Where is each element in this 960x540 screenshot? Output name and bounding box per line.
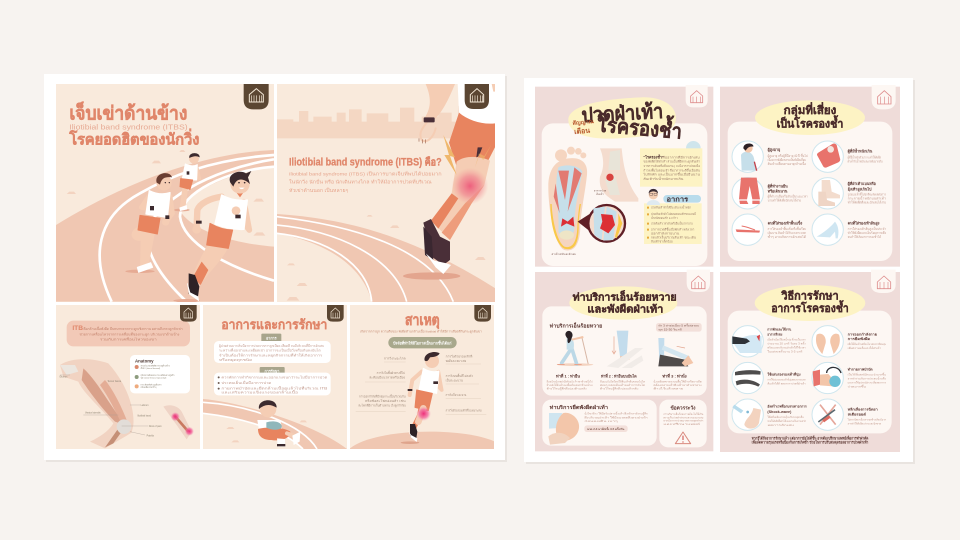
title: ปวดฝ่าเท้า	[581, 100, 664, 127]
muscle leg illustration: Vastus lateralis	[85, 411, 101, 414]
treatment: insoles	[732, 362, 806, 394]
pain glow	[454, 170, 487, 203]
treatment: physiotherapy: เป็นวิธีที่แพทย์มักแนะนำมากขึ้น	[848, 371, 886, 376]
treatment: shock wave	[732, 399, 807, 430]
treatment card: กายภาพบำบัดและยืดกล้ามเนื้อดูแล้วไปที่บริเวณ ITB	[221, 386, 328, 391]
definition box	[640, 148, 702, 187]
left sheet	[44, 74, 507, 462]
definition box: ก้าวลงพื้นในตอนเช้า ซึ่งอาการจะดีขึ้นเมื่อเดิน	[643, 167, 700, 172]
anatomy legend: ITB เสียดสีบริเวณข้อเข่า	[141, 382, 162, 386]
treatment: rest: ประมาณ 20 นาที วันละ 3 ครั้ง	[767, 341, 806, 345]
panel: stretching exercises	[535, 270, 713, 451]
side foot: ส้นเท้า	[596, 192, 604, 196]
footer note	[752, 434, 869, 446]
exercise captions: ข้างหลังให้ส้นเท้าแนบพื้นพร้อมย่อเข่าด้านหน้าลง	[547, 383, 593, 387]
intro callout: ITB	[72, 325, 83, 332]
right sheet	[524, 78, 915, 464]
definition box: "โรครองช้ำ"	[643, 153, 664, 159]
treatment: foot massage: การออกกำลังกาย	[848, 331, 877, 336]
treatment card: ควรพักการทำกิจกรรมและออกแรงจนกว่าจะไม่มีอาการปวด	[221, 374, 327, 379]
treatment: shock wave: ลดการอักเสบ	[767, 423, 795, 427]
definition box: จากการเดินหรือยืนนานๆ จะมีอาการปวดเมื่อ	[643, 163, 700, 169]
treatment pill: การรักษา	[265, 368, 279, 373]
city skyline	[277, 106, 465, 138]
right causes: เป็นระยะนาน	[446, 377, 463, 383]
exercise 1 figure	[557, 331, 593, 366]
risk item: standing long	[732, 178, 808, 209]
intro callout: คือกล้ามเนื้อพังผืด มีบทบาทจากกระดูกเชิงกราน ผสานถึงกระดูกหัวเข่า	[83, 326, 183, 331]
symptoms list: น้ำหนักตอนเช้า 2-3 ก้าว	[651, 215, 678, 220]
treatment: physiotherapy: ทำกายภาพบำบัด	[848, 366, 873, 371]
panel: treatment methods	[720, 270, 900, 452]
intro callout: ช่วยการเคลื่อนไหวจากการเคลื่อนที่ของกระดูก บริเวณเข่าด้านข้าง	[79, 331, 180, 336]
risk item: foot arch: กระจายน้ำหนักบนฝ่าเท้า	[848, 195, 886, 200]
zoom circle	[588, 205, 625, 242]
title line 2: โรคยอดฮิตของนักวิ่ง	[68, 127, 199, 148]
side foot	[594, 148, 638, 202]
inner card	[728, 122, 892, 261]
logo badge	[474, 305, 491, 322]
muscle leg illustration: Tensor fascia	[107, 380, 122, 383]
risk item: thin-soled shoes: เดินนาน ส้นเท้าได้รับแรงกระแทก	[768, 231, 806, 235]
anatomy legend: ปุ่ม lateral femoral epicondyle	[141, 376, 167, 381]
panel: plantar fasciitis warning signs	[535, 85, 713, 267]
side foot: อาการปวด	[594, 189, 607, 193]
title: สาเหตุ	[405, 313, 440, 329]
symptoms list: ส้นเท้าชาเล็กน้อย	[651, 237, 673, 243]
risk item: high heels: จนทำให้เกิดอาการรองช้ำได้	[848, 234, 881, 239]
left causes: สะโพกที่มีการเจ็บต้านทาน (วิ่งลูกจำกัด)	[358, 402, 406, 408]
body text: ในนักวิ่ง นักปั่น หรือ นักเดินทางไกล ทำให้มีอาการปวดที่บริเวณ	[289, 179, 432, 185]
treatment: physiotherapy: อาจทำร่วมกับการประคบน้ำแข็ง	[848, 375, 887, 380]
risk item: foot arch: อุ้งเท้าสูงเกินไป	[848, 185, 872, 192]
treatment: insoles: ส้นเท้าได้ดี ลดอาการปวดที่ฝ่าเท้า	[767, 381, 806, 385]
caution section	[663, 405, 704, 444]
left causes: การวิ่งระยะไกล	[384, 356, 406, 360]
title: กลุ่มที่เสี่ยง	[784, 102, 836, 118]
left causes: การวิ่งในพื้นผิวทางที่ไม่	[377, 370, 405, 375]
caution section: หากมีอาการปวดมากควรหยุดทำท่า	[663, 419, 704, 424]
definition box: ไปสักพัก และเป็นมากขึ้นเมื่อยืนนาน	[642, 171, 700, 177]
risk item: foot arch: ผู้ที่ฝ่าเท้าแบนหรือ	[848, 180, 876, 187]
title highlight	[755, 285, 865, 321]
treatment card: และเสริมความแข็งแรงของกล้ามเนื้อ	[221, 389, 298, 395]
treatment: foot massage: การยืดพังผืด	[848, 336, 870, 341]
risk item: elderly: ผู้สูงอายุ หรือผู้ที่มีอายุ 40 ปี ขึ้นไป	[768, 153, 808, 159]
logo tab	[686, 85, 708, 107]
foot sole diagram: ฝ่าเท้าปกติและอักเสบ	[552, 252, 576, 256]
small knee illustration	[163, 405, 194, 439]
title highlight	[755, 100, 865, 135]
lower left card	[542, 400, 657, 446]
anatomy legend: ส่วนประกอบพังผืด ITB อยู่ด้านข้าง	[141, 363, 170, 367]
logo tab	[687, 270, 710, 292]
exercise captions: ท่าที่ 3 : ท่านั่ง	[662, 372, 687, 378]
risk item: foot arch	[812, 178, 886, 209]
heading: Iliotibial band syndrome (ITBS) คือ?	[289, 156, 442, 169]
title	[777, 102, 843, 131]
intro callout: ร่วมกับการเคลื่อนไหวของขา	[100, 337, 157, 342]
title: สัญญาณ	[572, 118, 595, 127]
front runner	[173, 171, 251, 302]
treatment: no steroid injection: สเตียรอยด์	[848, 411, 866, 416]
exercise captions: ท่าที่ 2 : ท่ายืนบนบันได	[601, 372, 637, 378]
risk item: overweight: ผู้ที่มีน้ำหนักเกิน	[848, 148, 873, 155]
title: ท่าบริการเอ็นร้อยหวาย	[573, 289, 677, 303]
symptoms pill	[261, 334, 281, 342]
exercise captions: ท่าที่ 1 : ท่ายืน	[556, 372, 580, 378]
treatment: shock wave: ใช้คลื่นเสียงกระตุ้นบริเวณจุดเจ็บ	[767, 414, 804, 420]
anatomy legend	[130, 355, 190, 393]
treatment: shock wave: อัลตร้าเวฟช็อกบรรเทาอาการ	[767, 402, 807, 408]
symptoms list: ปวดส้นเท้าทำให้ยืน เดิน ลงน้ำหนัก	[651, 205, 691, 210]
left causes: สะท้อนมีแนวลาดหรือเอียง	[369, 375, 406, 380]
right causes: การวิ่งบนพื้นที่ไม่ลงตัว	[446, 373, 473, 378]
footer note: หากรู้ได้ถึงอาการรักษาแล้ว แต่อาการยังไม่ดีขึ้น อาจต้องปรึกษาแพทย์เพื่อการทำผ่าตัด	[752, 434, 869, 441]
panel: risk groups	[720, 85, 900, 267]
shadow	[403, 272, 460, 280]
exercise captions	[546, 372, 703, 391]
risk item: high heels: ทำให้พังผืดและเอ็นร้อยหวายตึง	[848, 229, 886, 235]
race track	[277, 214, 495, 303]
symptoms card	[214, 341, 331, 363]
risk item: high heels: คนที่ใส่รองเท้าส้นสูง	[848, 220, 880, 227]
running track	[56, 150, 274, 302]
muscle leg illustration: Iliotibial band	[137, 415, 152, 418]
blue decor circle	[686, 141, 701, 156]
risk item: overweight: ฝ่าเท้ารับน้ำหนักและกดทับมากเกิน	[848, 159, 883, 164]
treatment: physiotherapy: และการใช้อุปกรณ์ต่างๆ เพื่อลดอาการ	[848, 380, 887, 385]
exercise captions: ค้างไว้แล้วคลาย	[653, 387, 684, 391]
body text: หัวเข่าด้านนอก เป็นหลายๆ	[289, 186, 349, 194]
repetition note: ทุก 15-30 วินาที	[658, 327, 682, 332]
fascia stretch section: ตึงบริเวณฝ่าเท้า ใช้มือนวดคลึงตรงฝ่าเท้า	[584, 415, 648, 419]
exercise captions: คล้องปลายเท้าดึงเข้าหาตัวเข่าตรง	[653, 383, 703, 387]
right causes: การวิ่งด้วยรองเท้าที่ไม่เหมาะสม	[446, 409, 482, 413]
treatment: foot massage: เพื่อให้ส้นเท้าเคลื่อนไหวสะดวกยืดหยุ่น	[848, 342, 886, 347]
fascia stretch section	[548, 404, 648, 445]
muscle leg illustration	[59, 359, 162, 448]
risk item: thin-soled shoes: การใส่รองเท้าพื้นแข็งหรือพื้นเรียบ	[768, 225, 806, 231]
risk item: standing long: หรือเดินนาน	[768, 189, 788, 194]
risk item: foot arch: รูปแบบเท้าที่ไม่ปกติจะส่งผลต่อการ	[847, 191, 886, 196]
symptoms list: ปวดส้นเท้าเวลาเดินหรือยืนเป็นเวลานาน	[651, 220, 693, 226]
title	[573, 289, 677, 316]
title: เจ็บเข่าด้านข้าง	[69, 100, 187, 124]
treatment card: ประคบเย็นเมื่อมีอาการปวด	[221, 379, 271, 385]
symptoms card: ระหว่างที่งอเข่าและเหยียดเข่า อาการจะเป็นเมื่อวิ่งหรือเดินลงบันได	[219, 347, 321, 353]
doctor icon	[647, 189, 660, 205]
top card	[542, 306, 707, 396]
runner with knee pain	[401, 352, 442, 444]
symptoms card: จำเป็นต้องให้การรักษาและหยุดกิจกรรมที่ทำให้เกิดอาการ	[219, 351, 323, 358]
inner card	[728, 311, 892, 433]
treatment: rest: การพักและใช้งาน	[767, 327, 792, 332]
anatomy legend: ต้นขา (lateral femoral)	[141, 367, 161, 370]
body text	[289, 169, 442, 194]
caution section: และปรึกษาแพทย์	[663, 422, 701, 426]
caution section: ความเจ็บปวดทำท่าตามความเหมาะสม	[663, 414, 704, 419]
zoom pointer	[578, 212, 593, 234]
logo badge	[327, 305, 344, 322]
panel: causes	[350, 305, 495, 450]
risk item: elderly	[732, 141, 808, 172]
fascia stretch section: นวด 2-3 นาที/ครั้ง 3-5 ครั้ง/วัน	[587, 426, 625, 431]
panel: anatomy	[56, 305, 201, 450]
symptoms card: ผู้ป่วยส่วนมากเริ่มมีอาการปวดจากการถูกเบียด เสียดสี จนมีบริเวณที่มีการอักเสบ	[219, 343, 324, 348]
title: เป็นโรครองช้ำ	[777, 115, 843, 131]
back runner	[174, 153, 200, 211]
lower right card	[659, 400, 707, 447]
treatment: physiotherapy	[812, 362, 887, 394]
title: อาการและการรักษา	[221, 317, 327, 332]
risk item: high heels: การใส่รองเท้าส้นสูงเป็นประจำ	[848, 225, 886, 231]
logo tab	[872, 85, 896, 109]
symptoms list: ปวดส้นเท้าตัวไปตลอดจนเท้าขณะลงมี	[651, 212, 696, 216]
title highlight	[569, 286, 677, 320]
exercise captions: ค่อยๆ ปล่อยส้นเท้าลงต่ำกว่าบันได	[600, 383, 645, 388]
treatment: no steroid injection: หลีกเลี่ยงการฉีดยา	[848, 406, 878, 411]
fascia stretch section: นั่งไขว่ห้าง ใช้มือจับปลายนิ้วเท้า ดึงเข้าหาตัวจนรู้สึก	[584, 412, 648, 416]
treatment: insoles: ใช้แผ่นรองรองเท้าที่นุ่ม	[767, 371, 801, 377]
right causes: พอดีและเหมาะสม	[446, 359, 466, 363]
panel: ITBS cover	[56, 84, 274, 302]
inner card	[542, 123, 707, 266]
title: เตือน	[574, 127, 591, 136]
treatment: rest: อาการลึกลม	[767, 331, 782, 336]
foot sole diagram	[548, 147, 587, 256]
treatment: no steroid injection: ไม่ควรฉีดยาเนื่องจากผลข้างเคียงมีมาก	[847, 417, 886, 421]
treatment: foot massage	[812, 326, 886, 357]
olive question pill: ปัจจัยที่ทำให้มีโอกาสเป็นมากขึ้นได้แก่	[393, 339, 451, 345]
middle runner	[125, 173, 172, 273]
exercise captions: ค้างไว้จนรู้สึกตึงน่องแล้วกลับ	[600, 387, 639, 391]
treatment: rest: พร้อมนวดบริเวณฝ่าเท้าให้ใช้เวลา	[767, 345, 806, 349]
title: โรครองช้ำ	[595, 108, 683, 144]
fascia stretch section: ท่าบริการยืดพังผืดฝ่าเท้า	[550, 404, 608, 411]
risk item: standing long: ผู้ที่ทำงานยืน	[768, 182, 788, 189]
symptoms pill: อาการ	[266, 335, 277, 340]
caution section: ข้อควรระวัง	[670, 405, 696, 412]
caution section: การบริหารเอ็นร้อยหวายต้องไม่ให้เกิน	[663, 411, 703, 416]
risk item: standing long: ผู้ที่ทำงานยืนหรือเดินเป็นระยะเวลา	[768, 193, 808, 199]
treatment: no steroid injection: อาจทำให้พังผืดเปราะและฉีกขาด	[848, 421, 881, 425]
anatomy legend: เมื่อเคลื่อนไหวซ้ำๆ	[141, 385, 157, 389]
risk item: elderly: ส้นเท้าเปลี่ยนตามอายุกล้ามเนื้อ	[768, 161, 806, 167]
definition box: คืออาการที่มีการอักเสบ	[662, 154, 700, 159]
risk item: standing long: นานทำให้พังผืดอักเสบได้ง่าย	[768, 198, 801, 203]
risk item: high heels	[812, 214, 886, 245]
title: และพังผืดฝ่าเท้า	[587, 303, 664, 316]
muscle leg illustration: Gluteus	[59, 375, 68, 378]
fallen runner	[257, 400, 300, 447]
left causes: การออกกำลังที่มีกลุ่มกระเนื้อบริเวณก้น	[359, 393, 406, 399]
intro callout	[67, 321, 190, 346]
symptoms card: หรือหยุดทุกชนิด	[219, 357, 252, 363]
risk item: foot arch: ทำให้พังผืดตึงและอักเสบได้ง่าย	[848, 199, 886, 204]
symptoms list	[644, 203, 702, 244]
subtitle: Iliotibial band syndrome (ITBS)	[69, 122, 188, 131]
logo badge	[465, 84, 489, 109]
treatment: no steroid injection	[812, 399, 886, 430]
anatomy legend: เมื่อเข่าเหยียดตรง ITB เคลื่อนมาอยู่หน้า	[141, 373, 174, 377]
treatment: insoles: การใช้แผ่นรองรองเท้าที่นุ่มลดแรงกระแทก	[767, 377, 806, 382]
repetition note	[656, 323, 702, 332]
risk item: overweight	[812, 141, 883, 172]
symptoms label: อาการ	[666, 196, 689, 203]
muscle leg illustration: Patella	[147, 434, 154, 437]
body text: Iliotibial band syndrome (ITBS) เป็นการบาดเจ็บที่พบได้บ่อยมาก	[289, 169, 442, 176]
exercise captions: ค้างไว้จนรู้สึกตึงน่องด้านหลัง	[546, 387, 588, 391]
risk item: elderly: ผู้สูงอายุ	[768, 147, 780, 153]
title	[771, 290, 849, 315]
panel: what is ITBS	[277, 84, 495, 303]
exercise captions: ยืนบนบันไดโดยให้ส้นเท้าพ้นขอบบันได	[600, 379, 645, 383]
footer note: เพื่อลดความรุนแรงหรือป้องกันการเกิดซ้ำ ช่วยในการปรับสมดุลของอาการปวดฝ่าเท้า	[752, 439, 868, 446]
risk item: overweight: ผู้ที่มีน้ำหนักตัวมาก จะทำให้พังผืด	[848, 155, 881, 160]
lightning marks	[443, 135, 492, 175]
treatment: foot massage: เพิ่มความแข็งแรงให้ฝ่าเท้า	[848, 345, 882, 350]
exercise captions: ยืนหน้าผนังกดฝ่ามือกับผนัง ก้าวขาข้างหนึ่งไป	[546, 379, 593, 383]
treatment: rest: ในแต่ละครั้งนาน 3-5 นาที	[767, 349, 803, 353]
anatomy legend: Anatomy	[135, 359, 154, 364]
ground	[350, 432, 495, 450]
treatment card	[214, 373, 331, 395]
risk item: elderly: เนื่องจากพังผืดกลายเป็นพังผืดเสื่อม	[768, 156, 806, 162]
title: วิธีการรักษา	[781, 290, 839, 303]
treatment: physiotherapy: ปวดมากขึ้น	[848, 384, 866, 388]
title	[572, 100, 683, 144]
track	[203, 399, 347, 449]
title: อาการโรครองช้ำ	[771, 300, 849, 315]
logo badge	[180, 305, 197, 322]
risk item: thin-soled shoes: คนที่ใส่รองเท้าพื้นแข็ง	[768, 220, 802, 226]
exercise captions: นั่งเหยียดขาตรงบนพื้นใช้ผ้าหรือยางยืด	[653, 379, 702, 383]
right causes	[446, 354, 486, 414]
exercise 2 figure	[607, 331, 643, 368]
right causes: การวิ่งเป็นระยะนาน	[446, 391, 466, 397]
logo tab	[871, 270, 896, 293]
repetition note: ทำ 3 ท่าต่อเนื่อง 5 ครั้งต่อรอบ	[658, 324, 699, 328]
symptoms list: อาการปวดดีขึ้นเมื่อพักเท้า หลังเวลา	[651, 227, 695, 232]
treatment: shock wave: (Shock-wave)	[767, 410, 791, 414]
exercise 3 figure	[658, 338, 693, 366]
panel: symptoms and treatment	[203, 305, 347, 449]
definition box: ส้นเท้ารับน้ำหนักมากเกิน	[643, 176, 683, 181]
symptoms list: กดแล้วเจ็บบริเวณส้นเท้า ขณะเดิน	[651, 234, 696, 240]
left causes	[356, 356, 406, 411]
symptoms label	[663, 195, 701, 203]
title highlight	[568, 97, 676, 139]
risk item: thin-soled shoes: ซ้ำๆ อาจเกิดการอักเสบได้	[768, 234, 806, 240]
definition box: ของพังผืดใต้ฝ่าเท้า ส่วนเอ็นที่ยึดกระดูกส้นเท้า	[643, 158, 700, 164]
subtitle: เกิดจากการถูก ความตึงของ พังผืดต้านกล้ามเนื้อ Iliotibial ทำให้มีการเสียดสีกับกระดูกต้นขา	[360, 329, 482, 334]
left causes: หรือข้อสะโพกอ่อนล้า เช่น	[365, 398, 406, 403]
treatment: rest	[732, 326, 806, 357]
right causes: การวิ่งด้วยรองเท้าที่	[446, 354, 472, 358]
fascia stretch section: ก่อนลงเดิน เบาๆ	[584, 419, 619, 424]
logo badge	[244, 84, 269, 109]
muscle leg illustration: Root of pain	[149, 425, 162, 428]
olive question pill	[388, 337, 457, 348]
treatment pill	[260, 367, 285, 373]
muscle leg illustration: Labrum	[141, 404, 149, 407]
symptoms list: ออกกำลังกายนาน	[651, 231, 679, 235]
section heading: ท่าบริการเอ็นร้อยหวาย	[550, 321, 602, 329]
runner leg	[419, 84, 495, 274]
risk item: thin-soled shoes	[732, 214, 806, 245]
treatment: rest: เมื่อเท้าเมื่อยให้แช่น้ำอุ่น ซึ่งจะเป็นเวลา	[767, 336, 806, 342]
treatment: shock wave: ช่วยให้พังผืดฟื้นตัวได้เองอย่างเป็นธรรมชาติ	[767, 418, 806, 423]
